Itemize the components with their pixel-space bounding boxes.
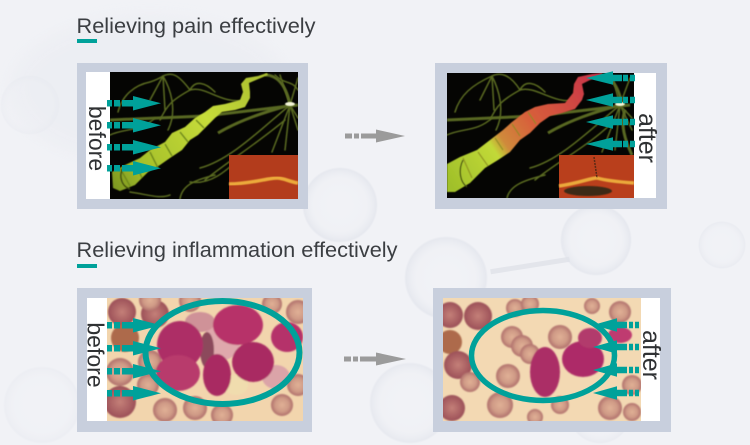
label: before: before bbox=[82, 322, 108, 388]
arrows: before bbox=[107, 96, 161, 176]
blood cell image before bbox=[107, 298, 303, 421]
label: after: after bbox=[637, 330, 665, 380]
heading: relieving inflammation: Relieving inflammation effectively bbox=[76, 239, 398, 262]
inflamed cell nuclei bbox=[156, 305, 303, 396]
yellow and red nerve fibre bbox=[447, 73, 602, 192]
label: before: before bbox=[84, 106, 110, 171]
panel: inflammation before bbox=[77, 288, 312, 432]
neuron image before bbox=[110, 72, 298, 199]
panel: pain before bbox=[77, 63, 308, 209]
arrow: pain before to after bbox=[345, 130, 405, 142]
heading underline bbox=[77, 264, 97, 268]
panel: pain after bbox=[435, 63, 667, 209]
heading: relieving pain: Relieving pain effectively bbox=[76, 15, 316, 38]
blood cell image after bbox=[437, 295, 642, 425]
neuron image after bbox=[447, 73, 634, 198]
remaining cell nuclei bbox=[530, 327, 632, 397]
red inset after bbox=[559, 155, 634, 198]
teal ellipse bbox=[146, 301, 300, 404]
arrow: inflammation before to after bbox=[344, 352, 406, 366]
arrows: after bbox=[586, 71, 635, 151]
teal ellipse bbox=[472, 310, 614, 400]
panel: inflammation after bbox=[433, 288, 671, 432]
yellow nerve fibre bbox=[112, 73, 268, 191]
arrows: after bbox=[593, 318, 639, 400]
arrows: before bbox=[107, 318, 161, 400]
red inset before bbox=[229, 155, 298, 199]
label: after: after bbox=[633, 113, 661, 163]
heading underline bbox=[77, 39, 97, 43]
